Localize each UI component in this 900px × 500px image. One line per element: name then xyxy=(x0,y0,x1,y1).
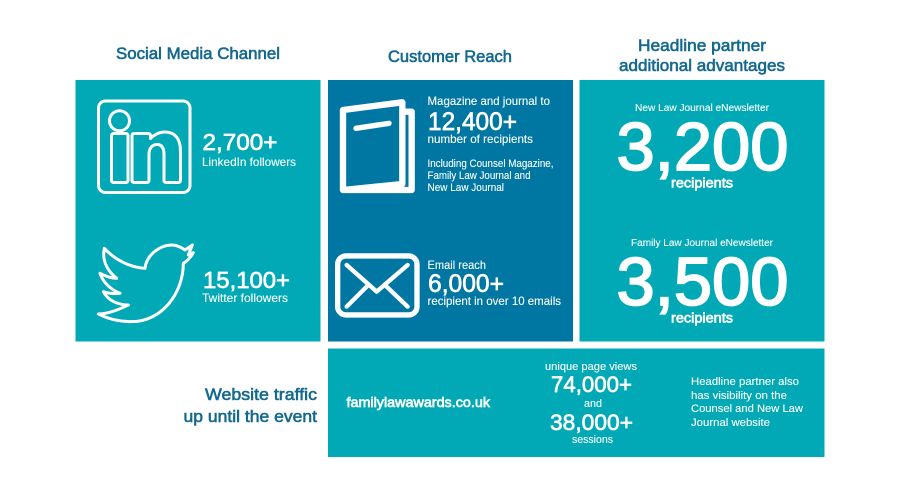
stat: family law journal enewsletter: Family Law Journal eNewsletter xyxy=(631,238,774,249)
heading: social media channel: Social Media Channel xyxy=(116,44,280,63)
text: magazine and journal stat xyxy=(428,94,554,194)
stat: page views and sessions xyxy=(545,361,638,446)
icon: magazine xyxy=(343,102,412,190)
heading: website traffic: up until the event xyxy=(184,407,317,426)
stat: family law journal enewsletter: recipients xyxy=(671,310,733,326)
stat: page views and sessions: sessions xyxy=(572,434,613,446)
text: headline partner visibility: Headline partner also xyxy=(691,376,799,388)
stat: linkedin followers: LinkedIn followers xyxy=(202,155,296,169)
stat: new law journal enewsletter: 3,200 xyxy=(616,109,788,185)
panel: headline partner advantages xyxy=(580,80,824,342)
text: magazine and journal stat: 12,400+ xyxy=(428,108,517,136)
heading: headline partner: Headline partner xyxy=(638,36,766,55)
panel: website traffic xyxy=(328,348,824,457)
heading: website traffic xyxy=(184,385,318,426)
stat: new law journal enewsletter: New Law Journal eNewsletter xyxy=(635,103,770,114)
stat: linkedin followers: 2,700+ xyxy=(202,129,278,155)
stat: linkedin followers xyxy=(202,129,296,169)
stat: twitter followers: 15,100+ xyxy=(203,267,290,293)
text: magazine and journal stat: New Law Journal xyxy=(428,182,504,194)
stat: twitter followers xyxy=(202,267,290,305)
text: email reach stat: Email reach xyxy=(428,258,486,272)
stat: new law journal enewsletter: recipients xyxy=(671,176,733,190)
text: magazine and journal stat: Magazine and journal to xyxy=(428,94,550,108)
stat: page views and sessions: 74,000+ xyxy=(551,372,632,397)
text: headline partner visibility: Counsel and New Law xyxy=(691,403,803,415)
text: website address: familylawawards.co.uk xyxy=(346,394,491,410)
text: headline partner visibility: has visibility on the xyxy=(691,390,787,402)
icon: linkedin xyxy=(98,101,190,192)
text: magazine and journal stat: Family Law Journal and xyxy=(428,170,530,182)
text: magazine and journal stat: Including Counsel Magazine, xyxy=(428,158,554,170)
text: headline partner visibility: Journal website xyxy=(691,417,770,429)
heading: headline partner xyxy=(619,36,785,75)
text: email reach stat: recipient in over 10 emails xyxy=(428,294,561,308)
stat: page views and sessions: 38,000+ xyxy=(550,410,633,435)
text: email reach stat xyxy=(428,258,561,308)
icon: twitter bird xyxy=(98,245,193,322)
panel: customer reach xyxy=(328,80,573,342)
panel: social media channel xyxy=(76,80,320,342)
stat: twitter followers: Twitter followers xyxy=(202,291,288,305)
text: headline partner visibility xyxy=(691,376,803,429)
heading: customer reach: Customer Reach xyxy=(388,47,512,66)
icon: envelope xyxy=(338,256,417,315)
stat: page views and sessions: and xyxy=(584,398,602,410)
stat: family law journal enewsletter: 3,500 xyxy=(616,244,788,320)
heading: headline partner: additional advantages xyxy=(619,56,785,75)
heading: website traffic: Website traffic xyxy=(205,385,318,404)
text: email reach stat: 6,000+ xyxy=(428,270,504,298)
stat: page views and sessions: unique page views xyxy=(545,361,638,373)
text: magazine and journal stat: number of recipients xyxy=(428,132,533,146)
